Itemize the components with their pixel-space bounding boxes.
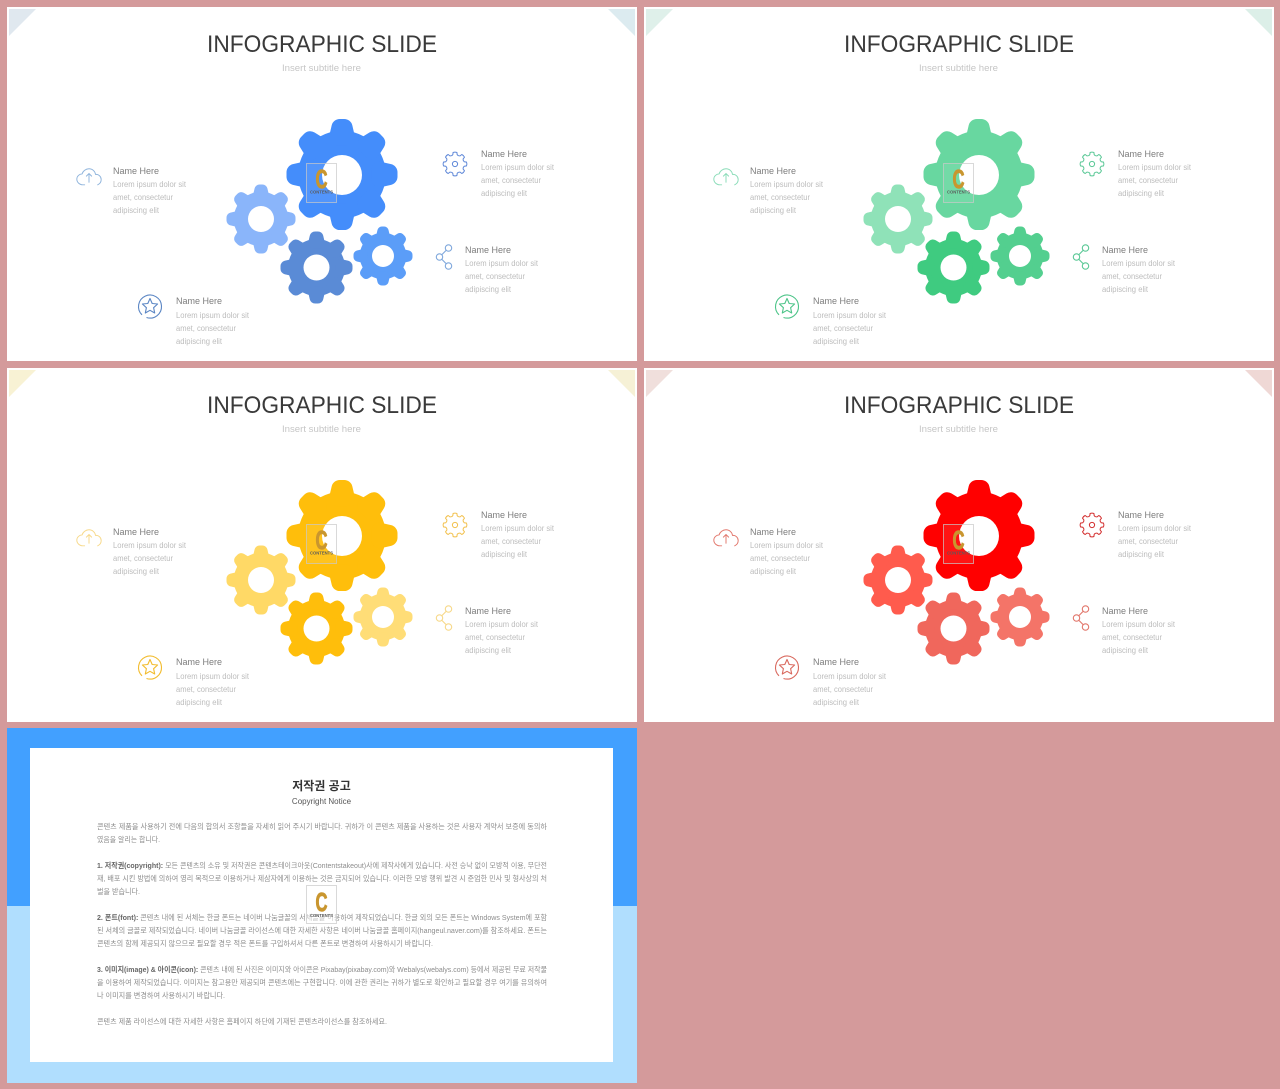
icon: cog outline — [1080, 152, 1104, 176]
text block: left item — [113, 527, 187, 576]
gear cluster — [869, 488, 1045, 659]
text block: bottom item: amet, consectetur — [813, 324, 873, 333]
text block: lower right item: Lorem ipsum dolor sit — [1102, 259, 1176, 268]
text block: font clause — [97, 912, 547, 948]
text block: lower right item — [1102, 245, 1176, 294]
text block: lower right item: amet, consectetur — [1102, 633, 1162, 642]
text block: bottom item: adipiscing elit — [176, 698, 223, 707]
text block: upper right item: adipiscing elit — [481, 550, 528, 559]
text block: left item: amet, consectetur — [750, 554, 810, 563]
text block: lower right item: amet, consectetur — [465, 272, 525, 281]
text block: upper right item: Lorem ipsum dolor sit — [1118, 524, 1192, 533]
text block: upper right item: amet, consectetur — [1118, 537, 1178, 546]
subtitle: Insert subtitle here — [282, 63, 361, 73]
text block: upper right item — [1118, 149, 1192, 198]
text block: upper right item: Name Here — [1118, 510, 1164, 521]
corner triangle right — [1245, 9, 1272, 36]
title: INFOGRAPHIC SLIDE — [844, 31, 1074, 58]
gear cluster — [232, 488, 408, 659]
text block: bottom item: amet, consectetur — [176, 324, 236, 333]
corner triangle left — [646, 9, 673, 36]
text block: lower right item: Name Here — [1102, 606, 1148, 617]
text block: copyright clause: 벌을 받습니다. — [97, 886, 140, 896]
icon: share — [1073, 245, 1089, 269]
icon: cog outline — [443, 152, 467, 176]
text block: image and icon clause: 나 이미지를 변경하여 사용하시기 바랍니다. — [97, 990, 225, 1000]
panel: yellow gears slide — [7, 368, 637, 722]
heading: copyright notice: 저작권 공고 — [292, 778, 351, 793]
watermark logo: C — [952, 525, 965, 555]
text block: bottom item: Name Here — [176, 657, 222, 668]
watermark logo: C — [316, 525, 328, 555]
icon: share — [436, 606, 452, 630]
icon: share — [1073, 606, 1089, 630]
text block: copyright clause: 재, 배포 시킨 방법에 의하여 영리 목적으로 이용하거나 제삼자에게 이용하는 것은 금지되어 있습니다. 이러한 모방 행위 발견 시 준엄한 민사 및 형사상의 처 — [97, 873, 547, 883]
watermark logo — [944, 164, 974, 202]
watermark logo: C — [952, 164, 965, 194]
text block: lower right item: amet, consectetur — [465, 633, 525, 642]
text block: lower right item: Lorem ipsum dolor sit — [465, 259, 539, 268]
watermark logo — [306, 886, 336, 924]
text block: font clause: 2. 폰트(font): 콘텐츠 내에 된 서체는 한글 폰트는 네이버 나눔글꼴의 서체들을 이용하여 제작되었습니다. 한글 외의 모든 폰트는 Windows System에 포함 — [97, 912, 547, 922]
text block: left item: adipiscing elit — [750, 567, 797, 576]
text block: left item — [750, 527, 824, 576]
watermark logo: C — [316, 887, 328, 917]
text block: bottom item: Name Here — [813, 296, 859, 307]
text block: upper right item: amet, consectetur — [481, 537, 541, 546]
corner triangle left — [9, 370, 36, 397]
text block: bottom item: Lorem ipsum dolor sit — [176, 311, 250, 320]
watermark logo — [306, 524, 336, 564]
text block: lower right item: adipiscing elit — [1102, 646, 1149, 655]
text block: upper right item: Lorem ipsum dolor sit — [481, 163, 555, 172]
text block: left item: Lorem ipsum dolor sit — [113, 180, 187, 189]
title: INFOGRAPHIC SLIDE — [844, 392, 1074, 419]
text block: upper right item: Lorem ipsum dolor sit — [481, 524, 555, 533]
icon: cloud upload — [714, 169, 738, 185]
panel: green gears slide — [644, 7, 1274, 361]
text block: bottom item — [813, 657, 887, 707]
text block: upper right item: Name Here — [481, 149, 527, 160]
corner triangle left — [646, 370, 673, 397]
text block: left item: adipiscing elit — [113, 206, 160, 215]
text block: lower right item: adipiscing elit — [1102, 285, 1149, 294]
subtitle: Insert subtitle here — [282, 424, 361, 434]
text block: upper right item: amet, consectetur — [1118, 176, 1178, 185]
text block: upper right item: adipiscing elit — [1118, 189, 1165, 198]
icon: cloud upload — [714, 530, 738, 546]
text block: left item: adipiscing elit — [113, 567, 160, 576]
text block: upper right item: Name Here — [1118, 149, 1164, 160]
text block: intro: 였음을 알리는 합니다. — [97, 834, 160, 844]
text block: left item: Name Here — [113, 166, 159, 177]
text block: font clause: 된 서체의 글꼴로 제작되었습니다. 네이버 나눔글꼴 라이선스에 대한 자세한 사항은 네이버 나눔글꼴 홈페이지(hangeul.naver.com)를 참조하세요. 폰트는 — [97, 925, 547, 935]
text block: font clause: 콘텐츠의 함께 제공되지 않으므로 필요할 경우 적은 폰트를 구입하셔서 다른 폰트로 변경하여 사용하시기 바랍니다. — [97, 938, 433, 948]
text block: bottom item: Name Here — [813, 657, 859, 668]
title: INFOGRAPHIC SLIDE — [207, 31, 437, 58]
text block: image and icon clause — [97, 964, 547, 1000]
text block: left item: amet, consectetur — [113, 554, 173, 563]
subtitle: Insert subtitle here — [919, 63, 998, 73]
text block: left item — [750, 166, 824, 215]
gear cluster — [232, 127, 408, 298]
watermark logo: C — [316, 164, 328, 194]
text block: lower right item: adipiscing elit — [465, 285, 512, 294]
text block: lower right item: Name Here — [465, 606, 511, 617]
text block: upper right item — [481, 149, 555, 198]
text block: bottom item — [176, 296, 250, 346]
text block: copyright clause: 1. 저작권(copyright): 모든 콘텐츠의 소유 및 저작권은 콘텐츠테이크아웃(Contentstakeout)사에 제작사에게 있습니다. 사전 승낙 없이 모방적 이용, 무단전 — [97, 860, 547, 870]
text block: bottom item — [813, 296, 887, 346]
text block: bottom item: adipiscing elit — [813, 698, 860, 707]
text block: left item: amet, consectetur — [750, 193, 810, 202]
watermark logo: CONTENTS — [947, 550, 970, 556]
icon: star badge — [139, 295, 162, 318]
text block: lower right item: adipiscing elit — [465, 646, 512, 655]
watermark logo: CONTENTS — [310, 550, 333, 556]
text block: lower right item: Name Here — [465, 245, 511, 256]
panel: red gears slide — [644, 368, 1274, 722]
text block: lower right item: Lorem ipsum dolor sit — [465, 620, 539, 629]
text block: upper right item: adipiscing elit — [1118, 550, 1165, 559]
text block: left item: adipiscing elit — [750, 206, 797, 215]
text block: image and icon clause: 을 이용하여 제작되었습니다. 이미지는 참고용만 제공되며 콘텐츠에는 구현합니다. 이에 관한 권리는 귀하가 별도로 확인하고 필요할 경우 여기를 유의하여 — [97, 977, 547, 987]
text block: upper right item: amet, consectetur — [481, 176, 541, 185]
text block: bottom item: Name Here — [176, 296, 222, 307]
text block: image and icon clause: 3. 이미지(image) & 아이콘(icon): 콘텐츠 내에 된 사진은 이미지와 아이콘은 Pixabay(pixabay.com)와 Webalys(webalys.com) 등에서 제공된 무료 저작물 — [97, 964, 547, 974]
watermark logo: CONTENTS — [310, 190, 333, 194]
text block: bottom item: amet, consectetur — [176, 685, 236, 694]
text block: left item: amet, consectetur — [113, 193, 173, 202]
panel: blue gears slide — [7, 7, 637, 361]
text block: bottom item: Lorem ipsum dolor sit — [176, 672, 250, 681]
text block: left item: Lorem ipsum dolor sit — [113, 541, 187, 550]
corner triangle right — [608, 9, 635, 36]
icon: star badge — [776, 295, 799, 318]
text block: intro — [97, 821, 547, 844]
text block: intro: 콘텐츠 제품을 사용하기 전에 다음의 합의서 조항들을 자세히 읽어 주시기 바랍니다. 귀하가 이 콘텐츠 제품을 사용하는 것은 사용자 계약서 보증에 동의하 — [97, 821, 547, 831]
subtitle: Insert subtitle here — [919, 424, 998, 434]
text block: lower right item — [1102, 606, 1176, 655]
gear cluster — [869, 127, 1045, 298]
icon: star badge — [776, 656, 799, 679]
text block: bottom item: amet, consectetur — [813, 685, 873, 694]
text block: left item: Name Here — [750, 527, 796, 538]
icon: cloud upload — [77, 530, 101, 546]
icon: cloud upload — [77, 169, 101, 185]
text block: upper right item: Name Here — [481, 510, 527, 521]
watermark logo: CONTENTS — [947, 190, 970, 194]
text block: bottom item: adipiscing elit — [813, 337, 860, 346]
text block: left item: Lorem ipsum dolor sit — [750, 180, 824, 189]
text block: lower right item: Lorem ipsum dolor sit — [1102, 620, 1176, 629]
corner triangle left — [9, 9, 36, 36]
text block: copyright clause — [97, 860, 547, 896]
text block: lower right item — [465, 245, 539, 294]
text block: left item: Name Here — [113, 527, 159, 538]
icon: share — [436, 245, 452, 269]
text block: upper right item: Lorem ipsum dolor sit — [1118, 163, 1192, 172]
watermark logo — [944, 524, 974, 564]
watermark logo: CONTENTS — [310, 913, 333, 918]
text block: lower right item: Name Here — [1102, 245, 1148, 256]
icon: cog outline — [443, 513, 467, 537]
icon: star badge — [139, 656, 162, 679]
text block: upper right item — [1118, 510, 1192, 559]
watermark logo — [306, 164, 336, 202]
text block: closing note: 콘텐츠 제품 라이선스에 대한 자세한 사항은 홈페이지 하단에 기재된 콘텐츠라이선스를 참조하세요. — [97, 1016, 387, 1026]
text block: left item — [113, 166, 187, 215]
text block: left item: Name Here — [750, 166, 796, 177]
panel: copyright notice — [7, 728, 637, 1083]
subheading: Copyright Notice — [292, 797, 352, 806]
corner triangle right — [1245, 370, 1272, 397]
title: INFOGRAPHIC SLIDE — [207, 392, 437, 419]
text block: bottom item: Lorem ipsum dolor sit — [813, 311, 887, 320]
text block: upper right item — [481, 510, 555, 559]
text block: lower right item — [465, 606, 539, 655]
icon: cog outline — [1080, 513, 1104, 537]
text block: lower right item: amet, consectetur — [1102, 272, 1162, 281]
text block: upper right item: adipiscing elit — [481, 189, 528, 198]
text block: bottom item: Lorem ipsum dolor sit — [813, 672, 887, 681]
text block: bottom item: adipiscing elit — [176, 337, 223, 346]
text block: bottom item — [176, 657, 250, 707]
corner triangle right — [608, 370, 635, 397]
text block: left item: Lorem ipsum dolor sit — [750, 541, 824, 550]
